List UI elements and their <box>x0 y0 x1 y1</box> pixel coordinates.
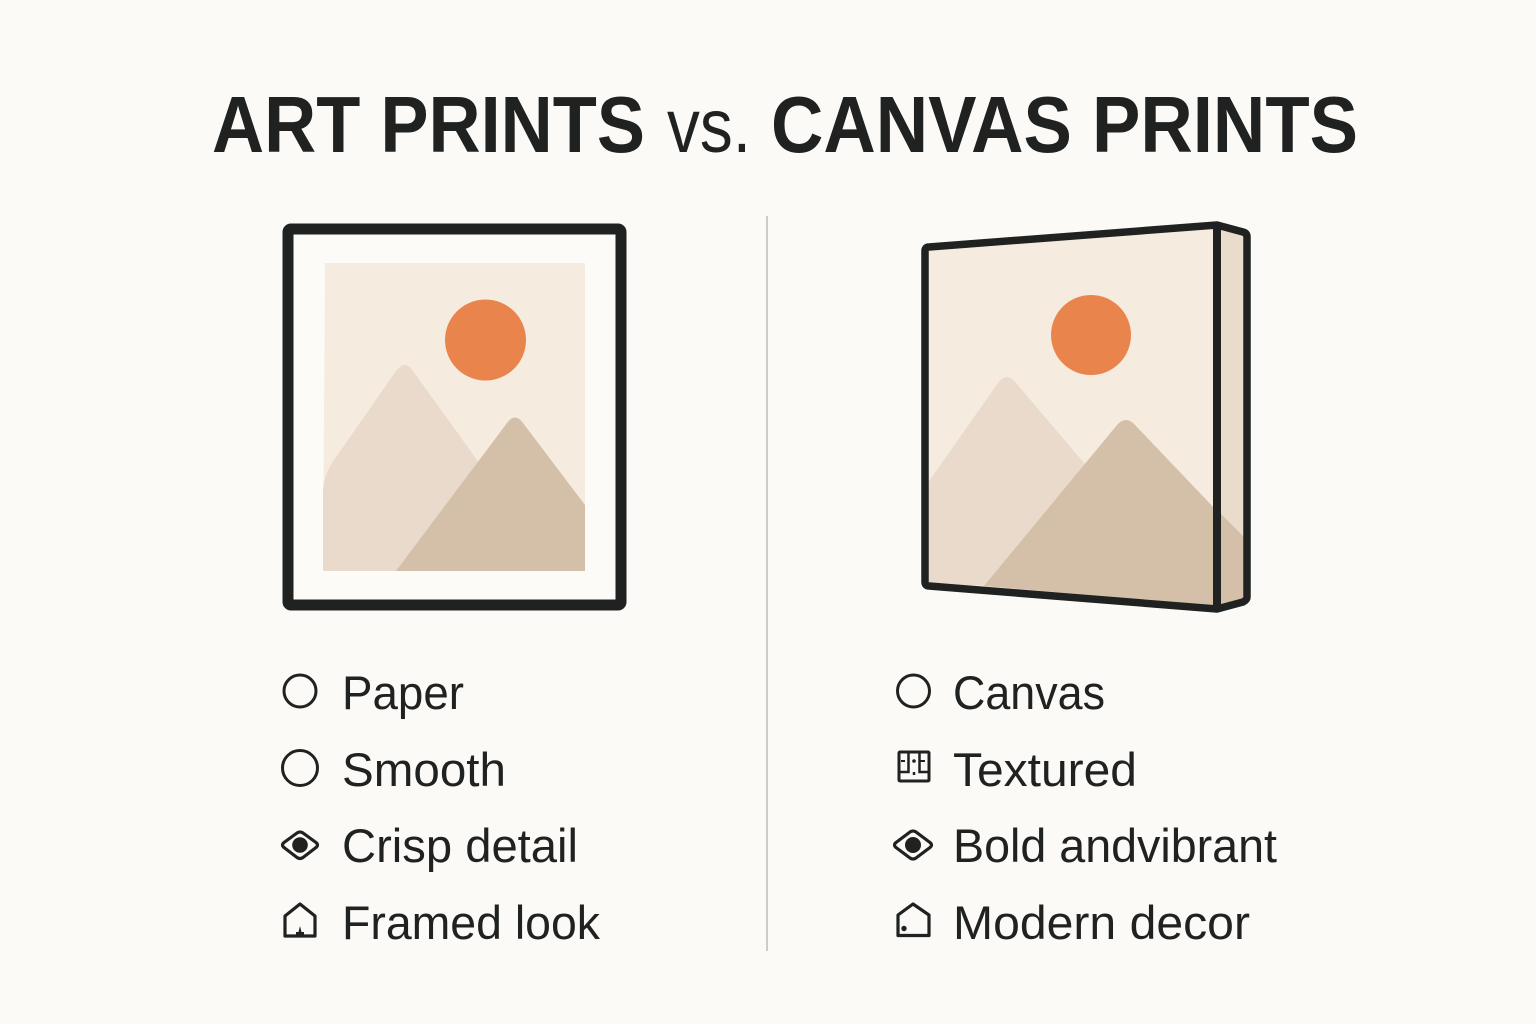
item: modern decor: Modern decor <box>953 896 1250 949</box>
title: vs. <box>667 84 751 169</box>
title: CANVAS PRINTS <box>771 80 1358 169</box>
item: paper <box>284 666 464 719</box>
title <box>212 80 1358 169</box>
item: smooth: Smooth <box>342 743 506 796</box>
icon: framed art print <box>288 229 621 605</box>
title: ART PRINTS <box>212 80 645 169</box>
item: paper: Paper <box>342 666 464 719</box>
item: framed look: Framed look <box>342 896 600 949</box>
item: canvas: Canvas <box>953 666 1105 719</box>
center divider <box>766 216 768 951</box>
list: canvas print features <box>894 666 1277 949</box>
list: art print features <box>282 666 600 949</box>
item: bold and vibrant: Bold andvibrant <box>953 819 1277 872</box>
item: textured: Textured <box>953 743 1137 796</box>
icon: canvas print <box>925 225 1247 609</box>
item: crisp detail: Crisp detail <box>342 819 578 872</box>
